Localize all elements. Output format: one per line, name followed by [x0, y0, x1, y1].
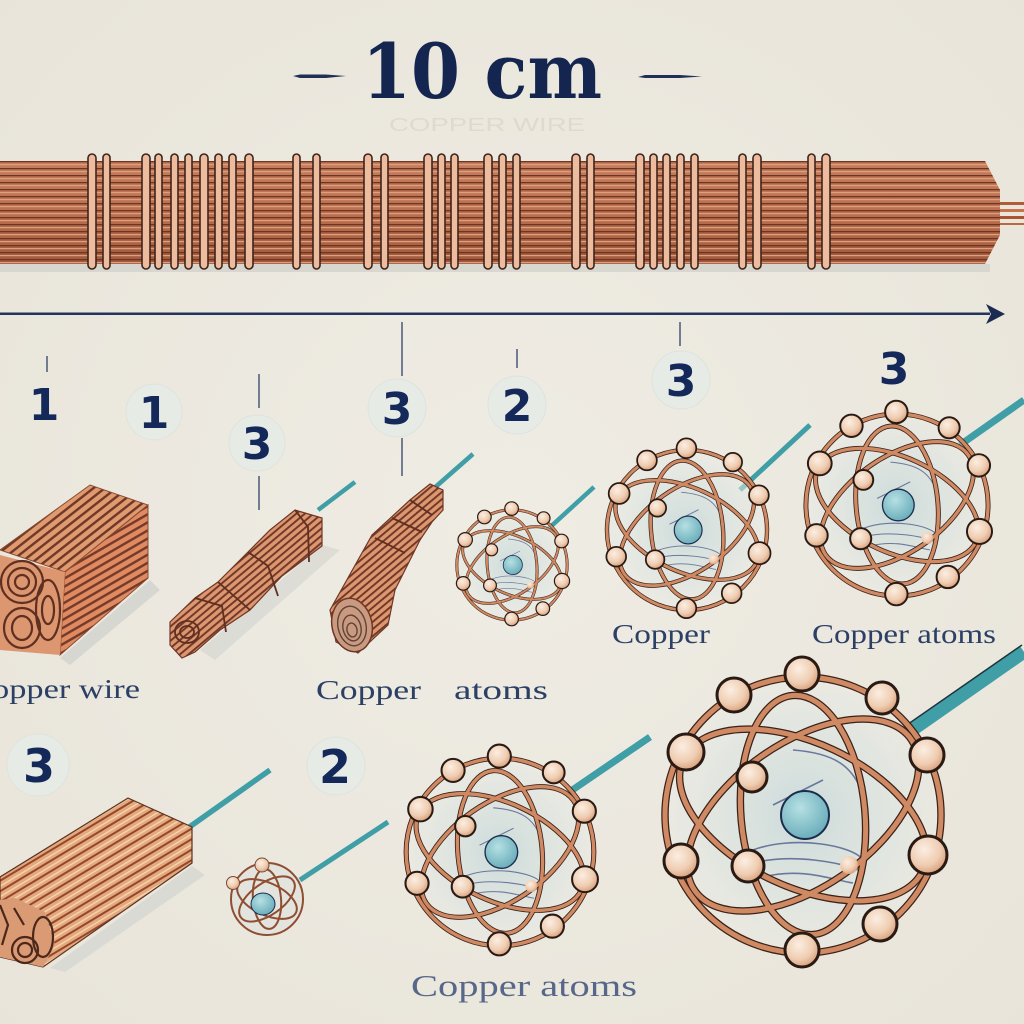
step number badges: 3 — [382, 384, 412, 435]
tiny atom — [226, 822, 388, 935]
scale arrow — [0, 304, 1005, 324]
step number badges: 2 — [502, 381, 532, 432]
step number badges: 3 — [23, 739, 55, 793]
copper wire bundle — [0, 154, 1024, 272]
medium large atom top right — [798, 400, 1024, 605]
wire segment 1 — [170, 482, 355, 660]
wire rings — [88, 154, 830, 269]
labels row 1 — [0, 619, 996, 705]
tick marks — [47, 322, 680, 510]
bottom label: Copper atoms — [411, 968, 637, 1003]
labels row 1: Copper — [316, 675, 421, 705]
title: 10 cm — [362, 27, 602, 116]
step number badges: 3 — [242, 419, 272, 470]
labels row 1: Copper atoms — [812, 619, 996, 649]
wire cross-section block — [0, 485, 160, 665]
step number badges: 3 — [666, 356, 696, 407]
title — [293, 27, 702, 116]
small atom — [452, 487, 594, 626]
wire segment 2 — [327, 454, 473, 656]
step number badges — [7, 344, 909, 796]
step number badges: 1 — [139, 388, 169, 439]
atom bottom middle — [398, 737, 650, 955]
step number badges: 1 — [29, 380, 59, 431]
long bundle bottom left — [0, 770, 270, 972]
labels row 1: atoms — [454, 675, 548, 705]
faint subtitle: COPPER WIRE — [389, 115, 585, 135]
largest atom — [653, 645, 1024, 967]
medium atom — [600, 425, 810, 618]
labels row 1: Copper — [612, 619, 710, 649]
step number badges: 2 — [319, 740, 351, 794]
step number badges: 3 — [879, 344, 909, 395]
